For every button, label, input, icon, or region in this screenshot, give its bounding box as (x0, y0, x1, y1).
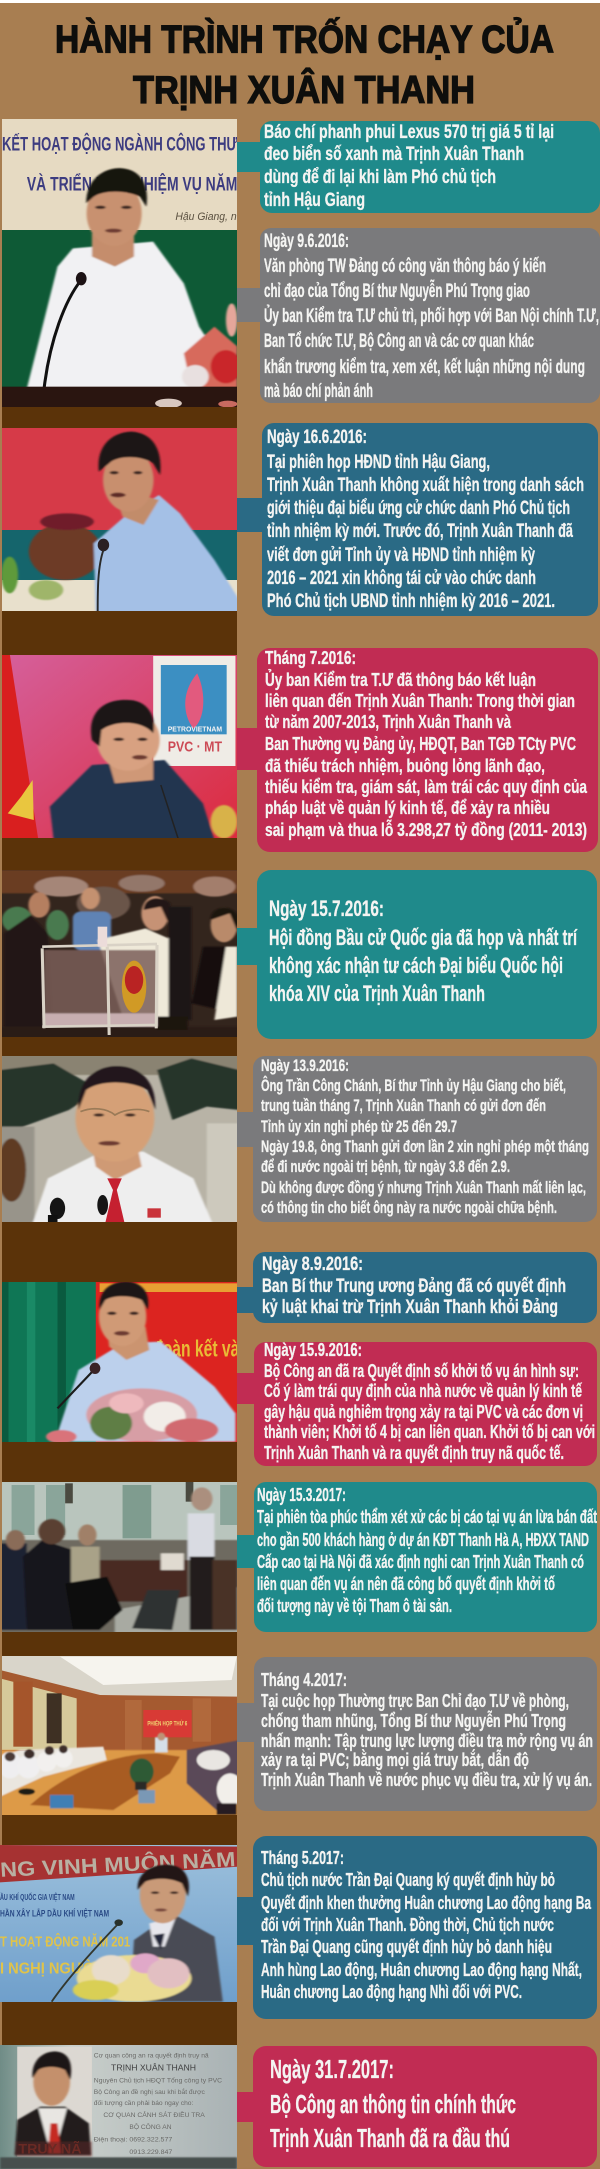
text: 15.3.2017: đối tượng này về tội Tham ô tài sản. (257, 1596, 452, 1616)
text: 15.7.2016: khóa XIV của Trịnh Xuân Thanh (269, 981, 485, 1006)
panel: Lexus report (237, 121, 600, 213)
text: 15.9.2016 (264, 1340, 595, 1463)
photo: speaker at PVC anniversary: ẦU KHÍ QUỐC GIA VIỆT NAM (0, 1892, 75, 1902)
text: 13.9.2016: Ngày 13.9.2016: (261, 1057, 349, 1075)
panel: April 2017 (237, 1657, 597, 1811)
photo: wanted notice: Cơ quan công an ra quyết định truy nã (94, 2051, 209, 2059)
photo: speaking at PVC-MT event (2, 655, 237, 838)
photo: Trinh Xuan Thanh at podium, green curtain (2, 119, 238, 407)
text: May 2017: Tháng 5.2017: (261, 1847, 344, 1868)
text: 15.3.2017: Ngày 15.3.2017: (257, 1485, 346, 1505)
text: 9.6.2016: Ngày 9.6.2016: (264, 231, 349, 252)
photo: wanted notice: Nguyên Chủ tịch HĐQT Tổng công ty PVC (94, 2077, 222, 2085)
panel: 15.9.2016 (237, 1340, 597, 1466)
text: July 2016: Tháng 7.2016: (265, 647, 356, 668)
panel: 16.6.2016 (237, 423, 598, 616)
photo: wanted notice: TRỊNH XUÂN THANH (111, 2063, 196, 2073)
text: 15.3.2017 (257, 1485, 597, 1616)
photo: speaker at PVC anniversary: T HOẠT ĐỘNG NĂM 201 (0, 1933, 130, 1950)
text: 15.7.2016: Ngày 15.7.2016: (269, 896, 384, 921)
text: 31.7.2017: Ngày 31.7.2017: (270, 2054, 394, 2084)
panel: 31.7.2017 (237, 2046, 597, 2167)
photo: wanted notice: 0913.229.847 (129, 2148, 172, 2156)
photo: speaker at PVC anniversary (0, 1845, 237, 2002)
text: 31.7.2017 (270, 2054, 516, 2153)
photo: wanted notice: BỘ CÔNG AN (129, 2122, 172, 2131)
text: 8.9.2016 (262, 1254, 566, 1318)
photo: speaking at PVC-MT event: PETROVIETNAM (168, 725, 222, 734)
text: 13.9.2016: Tỉnh ủy xin nghỉ phép từ 25 đến 29.7 (261, 1118, 457, 1136)
text: May 2017 (261, 1847, 591, 2002)
photo: wanted notice: TRUY NÃ (18, 2140, 82, 2157)
text: 16.6.2016: Ngày 16.6.2016: (267, 427, 367, 448)
photo: wanted notice (0, 2045, 237, 2169)
photo: speaking before red banner and green curtain (2, 1282, 240, 1442)
photo: ballot box at National Assembly (2, 870, 237, 1037)
photo: speaker at PVC anniversary: NG VINH MUÔN NĂM (0, 1848, 236, 1882)
text: 16.6.2016: Tại phiên họp HĐND tỉnh Hậu Giang, (267, 452, 490, 473)
photo: wanted notice: đối tượng cần phải báo ngay cho: (94, 2098, 194, 2107)
panel: May 2017 (237, 1836, 597, 2019)
text: 15.9.2016: Ngày 15.9.2016: (264, 1340, 362, 1360)
photo: wanted notice: Bộ Công an đề nghị sau khi bắt được (94, 2087, 206, 2096)
photo: speaking in blue shirt, red backdrop (2, 428, 237, 611)
text: 9.6.2016 (264, 231, 599, 402)
panel: 15.7.2016 (237, 870, 597, 1039)
text: Lexus report: tỉnh Hậu Giang (264, 190, 365, 211)
text: Lexus report (264, 122, 554, 211)
photo: Anti-corruption committee meeting: PHIÊN HỌP THỨ 6 (147, 1718, 188, 1727)
photo: speaking at PVC-MT event: PVC · MT (168, 740, 222, 755)
photo: speaker at PVC anniversary: I NGHỊ NGƯỜI (0, 1959, 100, 1977)
text: 13.9.2016 (261, 1057, 589, 1217)
photo: Tran Cong Chanh in front of palm (2, 1056, 237, 1222)
panel: 9.6.2016 (237, 228, 600, 403)
panel: July 2016 (237, 647, 598, 852)
text: Lexus report: dùng để đi lại khi làm Phó chủ tịch (264, 167, 496, 188)
text: July 2016 (265, 647, 588, 840)
text: April 2017: Tháng 4.2017: (261, 1670, 347, 1690)
photo: speaker at PVC anniversary: HẦN XÂY LẮP DẦU KHÍ VIỆT NAM (0, 1907, 109, 1919)
photo: wanted notice: Điện thoại: 0692.322.577 (94, 2136, 172, 2144)
text: 9.6.2016: mà báo chí phản ánh (264, 381, 373, 402)
dark brown photo column (2, 119, 237, 2169)
photo: wanted notice: CƠ QUAN CẢNH SÁT ĐIỀU TRA (103, 2110, 205, 2119)
text: 15.7.2016 (269, 896, 578, 1006)
photo: Anti-corruption committee meeting (2, 1656, 237, 1815)
panel: 13.9.2016 (237, 1056, 597, 1222)
photo: courtroom (2, 1482, 237, 1632)
panel: 15.3.2017 (237, 1482, 597, 1632)
title (55, 16, 554, 112)
text: April 2017 (261, 1670, 593, 1790)
text: 16.6.2016 (267, 427, 584, 612)
title: TRỊNH XUÂN THANH (133, 68, 475, 112)
text: 8.9.2016: Ngày 8.9.2016: (262, 1254, 363, 1275)
panel: 8.9.2016 (237, 1252, 597, 1323)
